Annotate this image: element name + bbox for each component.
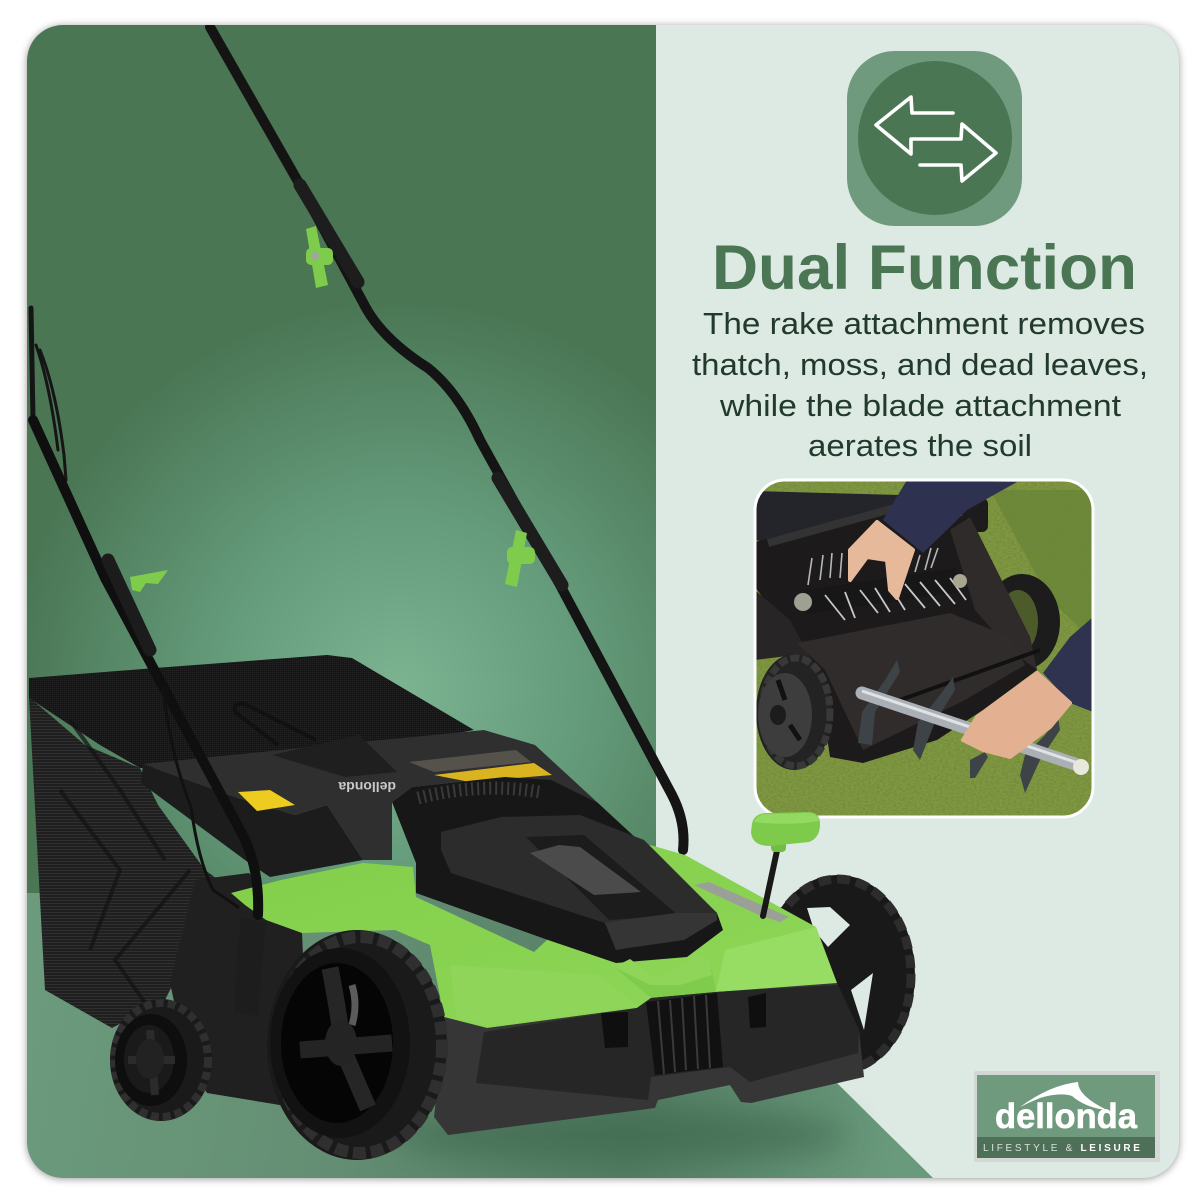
deck flap [272, 735, 397, 777]
bag roller bar [768, 508, 895, 543]
grass bag top [29, 655, 474, 772]
near handle [33, 420, 258, 915]
photo frame [755, 480, 1093, 817]
grip ridges [418, 788, 540, 798]
lever slot plate [694, 882, 789, 922]
large front wheel [267, 930, 447, 1160]
aerator blades [858, 660, 1060, 793]
description text [692, 306, 1148, 463]
far wheel [984, 574, 1060, 670]
darker grass [990, 490, 1093, 640]
right rear wheel [780, 874, 916, 1070]
lower hand [963, 673, 1070, 757]
motor cover [441, 815, 717, 950]
small rear wheel [110, 999, 212, 1121]
rake end cap [794, 593, 812, 611]
wing nut upper [306, 226, 333, 288]
cover recess [530, 845, 641, 895]
housing upper panel [476, 985, 859, 1100]
upper hand [850, 522, 913, 598]
green deck [231, 845, 837, 1028]
front lower housing [434, 983, 864, 1135]
description text: while the blade attachment [719, 388, 1121, 423]
deck bevel highlights [616, 927, 837, 998]
wing nut lower [505, 530, 535, 587]
machine underside [755, 507, 1037, 763]
logo: dellonda lifestyle and leisure [974, 1071, 1160, 1162]
cover centre ridge [526, 835, 678, 920]
height lever [751, 812, 820, 916]
logo word: dellonda [995, 1097, 1138, 1136]
ground shadow [390, 1107, 850, 1163]
heading: Dual Function [712, 233, 1137, 303]
aerator shaft [862, 693, 1078, 765]
rating label [238, 790, 295, 811]
collection bag [755, 491, 900, 543]
green nose bump [614, 952, 712, 985]
lock clip [130, 570, 168, 592]
icon: dual arrows badge [847, 51, 1022, 226]
description text: The rake attachment removes [703, 306, 1145, 341]
logo wave [1020, 1082, 1107, 1110]
description text: aerates the soil [808, 428, 1032, 463]
panel: left green background [27, 25, 656, 893]
photo: attachments being swapped [755, 480, 1093, 817]
left wheel [756, 654, 832, 770]
axle [900, 650, 1040, 700]
floor wedge [27, 893, 933, 1178]
housing vents [601, 993, 766, 1075]
deck front [141, 764, 363, 877]
motor housing [392, 777, 723, 963]
product: lawn raker and scarifier [29, 27, 915, 1163]
handle sleeve [234, 917, 266, 1016]
left plate [755, 590, 818, 672]
deck top [143, 730, 598, 860]
rear body [170, 873, 310, 1110]
side plate [950, 517, 1037, 670]
rear handle bail [31, 308, 66, 480]
cover nose [605, 913, 717, 950]
description text: thatch, moss, and dead leaves, [692, 347, 1148, 382]
warning labels [409, 750, 552, 782]
grass bag side mesh [29, 697, 232, 1028]
bag carry loop [234, 704, 316, 745]
bag side folds [60, 720, 190, 1010]
upper sleeve [883, 480, 1017, 553]
grass [755, 480, 1093, 817]
main handle, far side [210, 27, 684, 850]
logo tagline: LIFESTYLE & LEISURE [983, 1143, 1143, 1154]
icon: swap arrows [876, 97, 996, 181]
lower sleeve [1043, 617, 1093, 712]
brand mark on deck: dellonda [338, 779, 396, 795]
rake tines lower [825, 578, 966, 620]
aerator cap [1073, 759, 1089, 775]
rake roller [806, 580, 958, 602]
rake tines upper [808, 548, 938, 585]
drum housing [797, 613, 1025, 750]
small far wheel [962, 498, 988, 532]
